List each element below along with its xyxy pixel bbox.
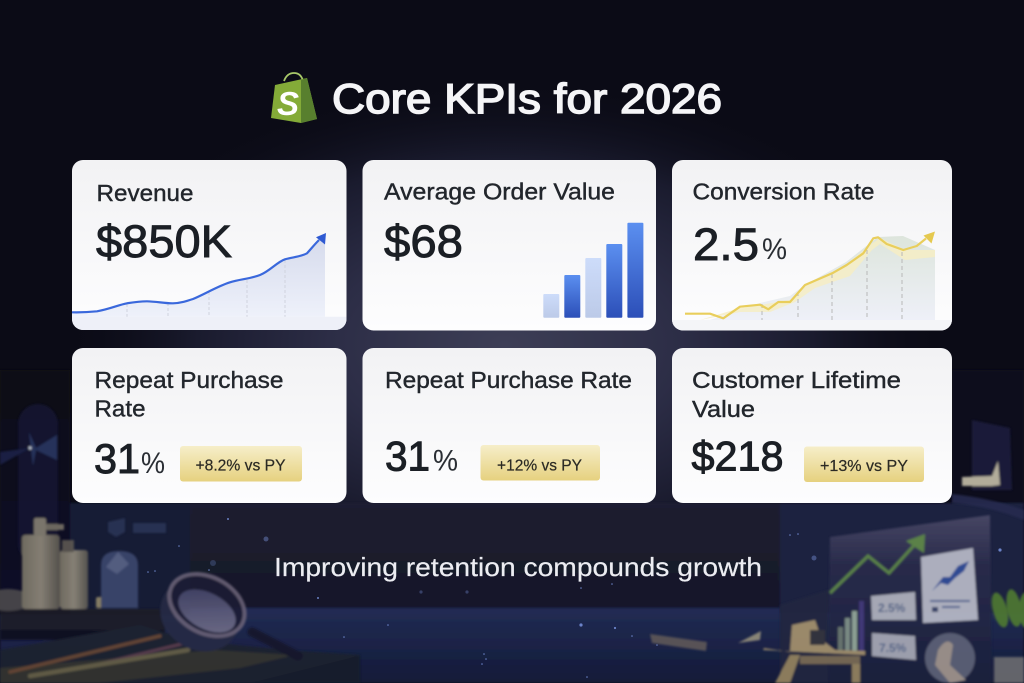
stat tile 2.5%: 2.5% <box>878 601 906 615</box>
magnifier handle <box>252 632 298 656</box>
value: $218 <box>692 432 784 480</box>
small bars <box>838 601 864 651</box>
icon: shopping bag: S <box>277 85 299 122</box>
ledge <box>952 494 1024 520</box>
glass jar <box>101 551 138 608</box>
change badge: +8.2% vs PY <box>196 458 286 474</box>
document with blue arrow <box>921 548 978 623</box>
small jar <box>96 597 119 608</box>
label: Conversion Rate <box>692 178 874 204</box>
label: Revenue <box>96 180 194 206</box>
papers and pencils <box>10 636 190 676</box>
small floating shapes <box>650 631 761 651</box>
plant pot <box>994 657 1024 683</box>
wooden stand <box>763 620 865 683</box>
bar chart <box>543 223 643 318</box>
title with Shopify-style bag <box>271 73 722 123</box>
label: Repeat Purchase Rate <box>385 367 632 393</box>
green growth arrow <box>830 534 925 593</box>
conversion line chart <box>672 232 952 330</box>
background scene: stars <box>147 518 1002 678</box>
large bottle <box>22 518 64 609</box>
icon: shopping bag <box>271 73 317 123</box>
heading: Core KPIs for 2026 <box>332 75 722 122</box>
dish on shelf <box>0 589 32 611</box>
label <box>94 367 284 422</box>
value: 31 <box>385 432 430 480</box>
label: Repeat Purchase <box>94 367 284 393</box>
small bottle <box>60 540 88 609</box>
panel: average order value <box>362 160 656 330</box>
takeaway caption: Improving retention compounds growth <box>274 552 762 582</box>
label: Rate <box>94 396 146 422</box>
value: $68 <box>384 216 463 267</box>
label: Average Order Value <box>384 178 615 204</box>
change badge <box>804 446 924 482</box>
stat tile 7.5% <box>872 633 916 660</box>
label: Customer Lifetime <box>692 367 901 393</box>
change badge: +13% vs PY <box>820 458 908 475</box>
revenue area chart <box>72 233 346 330</box>
board <box>828 515 992 683</box>
percent sign: % <box>433 444 458 478</box>
change badge <box>480 445 600 480</box>
dim back panel with label <box>108 518 166 537</box>
value: $850K <box>96 216 232 267</box>
upper right box with bracket <box>962 420 1012 490</box>
left wall star decoration <box>0 404 58 564</box>
value: 2.5 <box>693 219 759 270</box>
desk <box>0 625 360 683</box>
background scene: left shelf with bottles and magnifier <box>0 404 360 683</box>
panel: customer lifetime value <box>672 348 952 503</box>
magnifier <box>147 559 258 665</box>
label <box>692 367 901 422</box>
stat tile 2.5% <box>871 592 916 620</box>
stat tile 7.5%: 7.5% <box>879 641 907 655</box>
change badge: +12% vs PY <box>497 458 582 474</box>
panel: conversion rate <box>672 160 952 330</box>
percent sign: % <box>141 447 165 480</box>
change badge <box>180 446 302 482</box>
panel: repeat purchase rate <box>362 348 656 503</box>
panel: revenue <box>72 160 346 330</box>
panel: repeat purchase rate (two-line label) <box>72 348 346 503</box>
background scene: floor and shelves <box>0 370 1024 683</box>
value: 31 <box>94 435 140 482</box>
label: Value <box>692 396 755 422</box>
background scene: right desk with growth board <box>650 420 1024 683</box>
plant <box>989 588 1024 629</box>
shelf <box>0 609 165 637</box>
pie chart <box>925 633 975 683</box>
percent sign: % <box>762 233 787 266</box>
